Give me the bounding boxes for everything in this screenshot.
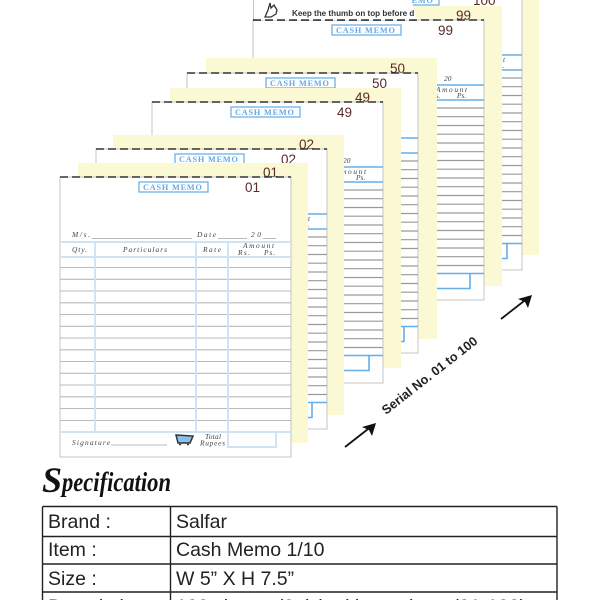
memo sheet 02: Amount — [278, 214, 311, 223]
memo sheet 49: Rs. — [329, 173, 339, 182]
row: size: Size : — [48, 568, 97, 590]
memo sheet 49: Ps. — [355, 173, 365, 182]
memo sheet 100 — [291, 0, 539, 270]
memo sheet 02: CASH MEMO — [179, 155, 239, 164]
memo sheet 01: Amount — [242, 241, 275, 250]
arrow: lower — [345, 423, 376, 447]
memo sheet 01: Ps. — [263, 248, 275, 257]
memo sheet 01: 01 — [245, 180, 260, 195]
memo sheet 01: Rs. — [237, 248, 250, 257]
memo sheet 99: 20 — [444, 74, 452, 83]
memo sheet 100: 20 — [482, 44, 490, 53]
icon: thumb — [265, 3, 277, 17]
memo sheet 50: CASH MEMO — [270, 79, 330, 88]
memo sheet 01: Particulars — [122, 245, 167, 254]
memo sheet 01: M/s. — [71, 230, 90, 239]
memo sheet 99: Ps. — [456, 91, 466, 100]
memo sheet 02: 20 — [287, 203, 295, 212]
memo sheet 50: 50 — [390, 61, 405, 76]
memo sheet 01 — [60, 163, 308, 457]
memo sheet 01: 20 — [251, 230, 261, 239]
row: brand: Salfar — [176, 511, 227, 533]
memo sheet 99: CASH MEMO — [336, 26, 396, 35]
memo sheet 99: Rs. — [430, 91, 440, 100]
row: brand — [48, 511, 227, 533]
heading: Specification — [42, 460, 171, 500]
memo sheet 50 — [187, 58, 437, 353]
memo sheet 99: 99 — [456, 8, 471, 23]
row: size: W 5” X H 7.5” — [176, 568, 294, 590]
memo sheet 49: 49 — [337, 105, 352, 120]
memo sheet 99 — [253, 6, 502, 300]
memo sheet 99: 99 — [438, 23, 453, 38]
memo sheet 01: Signature — [72, 438, 111, 447]
serial number label: Serial No. 01 to 100 — [379, 333, 480, 417]
memo sheet 01: Rate — [202, 245, 222, 254]
row: size — [48, 568, 294, 590]
memo sheet 99: Amount — [435, 85, 468, 94]
memo sheet 01: 01 — [263, 165, 278, 180]
row: brand: Brand : — [48, 511, 111, 533]
memo sheet 49 — [152, 88, 401, 383]
memo sheet 02 — [96, 135, 344, 429]
memo sheet 100: Amount — [473, 55, 506, 64]
memo sheet 100: Ps. — [494, 61, 504, 70]
memo sheet 49: 20 — [343, 156, 351, 165]
row: item — [48, 539, 325, 561]
memo sheet 49: 49 — [355, 90, 370, 105]
thumb notice strip — [253, 0, 418, 20]
memo sheet 100: Rs. — [468, 61, 478, 70]
arrow: upper — [501, 295, 532, 319]
thumb notice strip: Keep the thumb on top before d — [292, 9, 414, 18]
memo sheet 01: Qty. — [72, 245, 87, 254]
memo sheet 50: 50 — [372, 76, 387, 91]
icon: memo logo — [176, 435, 193, 446]
specification table — [42, 506, 557, 600]
memo sheet 01: Total — [205, 432, 221, 441]
memo sheet 49: CASH MEMO — [235, 108, 295, 117]
row: item: Cash Memo 1/10 — [176, 539, 325, 561]
memo sheet 02: Ps. — [299, 220, 309, 229]
memo sheet 49: Amount — [334, 167, 367, 176]
memo sheet 01: Date — [196, 230, 217, 239]
heading: Specification: S — [42, 460, 62, 500]
heading: Specification: pecification — [60, 467, 171, 497]
memo sheet 02: 02 — [281, 152, 296, 167]
memo sheet 02: 02 — [299, 137, 314, 152]
memo sheet 01: Rupees — [199, 438, 225, 448]
memo sheet 01: CASH MEMO — [143, 183, 203, 192]
row: item: Item : — [48, 539, 97, 561]
